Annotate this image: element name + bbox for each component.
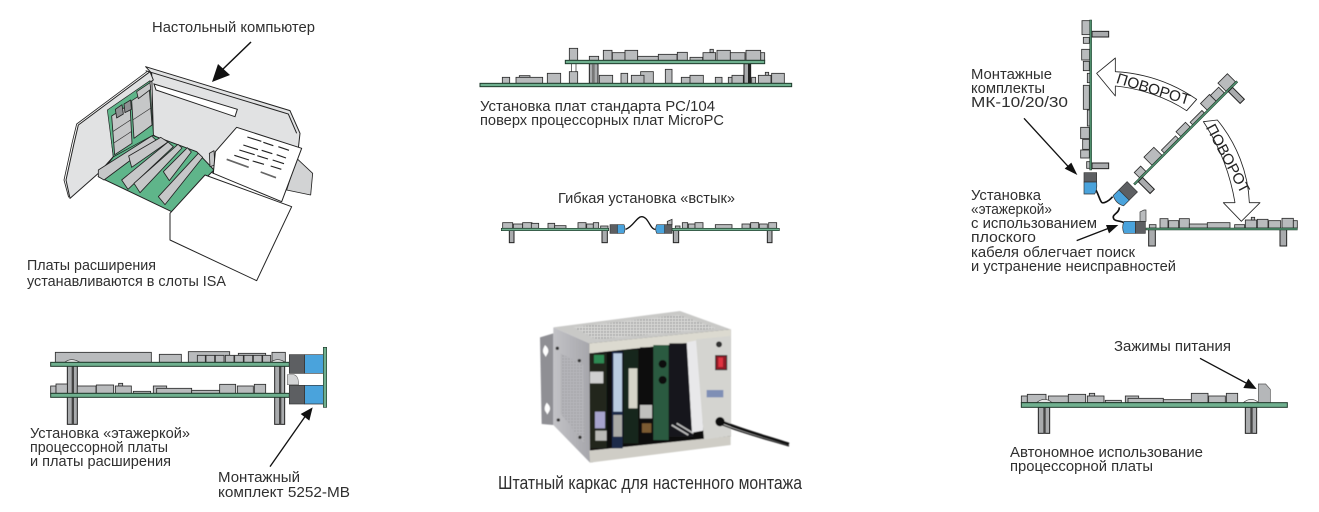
label: mounting kits: Монтажные — [971, 66, 1052, 83]
vertical board — [1082, 21, 1090, 35]
photo: wall mount enclosure — [540, 311, 789, 463]
riser card — [107, 81, 153, 157]
illustration: rotating board stack — [1024, 20, 1297, 246]
label: mounting kit 5252-MB: Монтажный — [218, 469, 300, 486]
arrow: power clamps — [1200, 358, 1247, 383]
ISA slots — [98, 136, 157, 180]
diagonal board — [1126, 73, 1250, 197]
label: expansion cards: устанавливаются в слоты ISA — [27, 273, 226, 290]
back panel — [146, 67, 300, 173]
illustration: stacked CPU and expansion boards — [51, 347, 327, 467]
label: stacked installation with flat cable: с использованием — [971, 215, 1097, 232]
label: standalone use: процессорной платы — [1010, 458, 1153, 475]
expansion card two — [170, 175, 292, 281]
label: PC/104 installation: Установка плат стандарта PC/104 — [480, 98, 715, 115]
front frame — [589, 329, 731, 463]
rotate label: lower: ПОВОРОТ — [1202, 121, 1253, 196]
illustration: PC/104 board over MicroPC board — [480, 48, 792, 87]
arrow: mounting kits — [1024, 118, 1068, 167]
mounting bracket — [540, 333, 553, 425]
connector: diagonal board — [1112, 182, 1137, 207]
label: desktop computer: Настольный компьютер — [152, 19, 315, 36]
flat cable — [1096, 190, 1125, 223]
label: stacked installation: Установка «этажеркой» — [30, 425, 190, 442]
label: power clamps: Зажимы питания — [1114, 338, 1231, 355]
label: mounting kits: комплекты — [971, 80, 1045, 97]
card modules — [590, 353, 607, 448]
label: stacked installation with flat cable: кабеля облегчает поиск — [971, 244, 1135, 261]
label: PC/104 installation: поверх процессорных плат MicroPC — [480, 112, 724, 129]
label: stacked installation: процессорной платы — [30, 439, 168, 456]
rotate arrow: lower — [1203, 120, 1260, 221]
label: stacked installation with flat cable: и устранение неисправностей — [971, 258, 1176, 275]
arrow: flat cable — [1077, 228, 1108, 241]
arrow: mounting kit — [270, 417, 305, 467]
power cable — [722, 422, 789, 444]
label: mounting kit 5252-MB: комплект 5252-MB — [218, 484, 350, 501]
power panel — [696, 336, 731, 439]
expansion card one — [213, 127, 302, 202]
top ventilated cover — [553, 311, 731, 343]
label: mounting kits: МК-10/20/30 — [971, 94, 1068, 111]
card slots marks — [234, 137, 289, 169]
power clamp — [1258, 384, 1270, 403]
label: stacked installation with flat cable: Установка — [971, 187, 1042, 204]
connector: horizontal board — [1135, 221, 1145, 233]
illustration: flexible butt joint — [501, 217, 779, 243]
label: standalone use: Автономное использование — [1010, 444, 1203, 461]
label: flexible butt installation: Гибкая установка «встык» — [558, 190, 735, 207]
left panel — [66, 72, 153, 198]
right side flap — [287, 158, 313, 195]
label: expansion cards: Платы расширения — [27, 257, 156, 274]
label: stacked installation with flat cable: плоского — [971, 229, 1036, 246]
connector: vertical board — [1084, 173, 1097, 182]
illustration: standalone CPU board — [1021, 358, 1287, 433]
top rail — [154, 84, 237, 117]
horizontal board — [1149, 229, 1155, 246]
arrow: desktop computer — [212, 42, 251, 82]
label: stacked installation with flat cable: «этажеркой» — [971, 201, 1052, 218]
illustration: desktop computer with expansion cards — [64, 67, 313, 281]
label: stacked installation: и платы расширения — [30, 453, 171, 470]
rotate arrow: upper — [1097, 58, 1197, 111]
side panel — [553, 327, 590, 463]
motherboard — [98, 135, 214, 212]
mounting kit 5252-MB — [287, 347, 327, 407]
caption: wall mount enclosure: Штатный каркас для настенного монтажа — [498, 473, 803, 493]
rotate label: upper: ПОВОРОТ — [1114, 70, 1192, 109]
